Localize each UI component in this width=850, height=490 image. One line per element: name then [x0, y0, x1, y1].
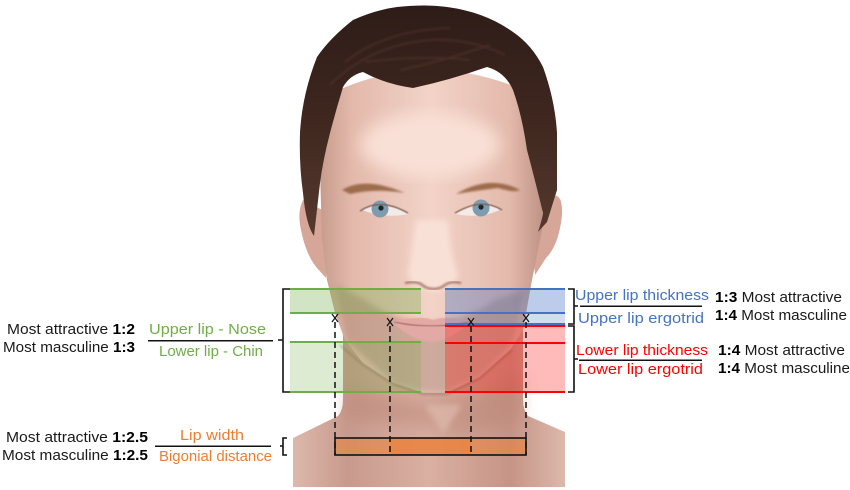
left ratio: upper lip nose / lower lip chin: Most masculine 1:3 [3, 339, 135, 356]
right ear [530, 195, 562, 275]
right ratio: lower lip thickness / ergotrid: 1:4 Most masculine [718, 360, 850, 377]
right ratio: upper lip thickness / ergotrid: 1:3 Most attractive [715, 289, 842, 306]
left ratio: lip width / bigonial distance: Lip width [180, 427, 244, 444]
left ratio: lip width / bigonial distance [2, 427, 272, 465]
left ratio: upper lip nose / lower lip chin [3, 321, 273, 360]
right ratio: lower lip thickness / ergotrid [576, 342, 850, 378]
lips [392, 318, 470, 342]
left ear [299, 200, 332, 278]
right ratio: upper lip thickness / ergotrid: Upper lip thickness [575, 287, 709, 304]
photo: man's face [293, 6, 565, 487]
right ratio: lower lip thickness / ergotrid: 1:4 Most attractive [718, 342, 845, 359]
right eye [455, 200, 502, 216]
dashed guide lines with x markers [332, 314, 529, 455]
bracket: lip width [280, 438, 287, 455]
overlay: lip width and bigonial distance box [335, 438, 526, 455]
left bracket: lips and chin [278, 289, 290, 392]
overlay: upper lip to nose (green) [290, 288, 421, 314]
left ratio: lip width / bigonial distance: Most attractive 1:2.5 [6, 429, 148, 446]
right eyebrow [456, 183, 520, 194]
left ratio: upper lip nose / lower lip chin: Upper lip - Nose [149, 321, 266, 338]
right ratio: upper lip thickness / ergotrid: Upper lip ergotrid [578, 310, 704, 327]
forehead highlight [360, 113, 500, 177]
left eyebrow [342, 184, 405, 194]
left ratio: lip width / bigonial distance: Most masculine 1:2.5 [2, 447, 148, 464]
right ratio: upper lip thickness / ergotrid [575, 287, 847, 327]
right bracket: lower lip [568, 326, 578, 392]
right ratio: upper lip thickness / ergotrid: 1:4 Most masculine [715, 307, 847, 324]
face skin [318, 70, 544, 393]
right bracket: upper lip [568, 289, 578, 324]
overlay: upper lip thickness (blue) [445, 288, 565, 325]
left eye [360, 200, 408, 218]
neck and shoulders [293, 330, 565, 487]
right ratio: lower lip thickness / ergotrid: Lower lip ergotrid [578, 361, 703, 378]
hair [300, 6, 557, 236]
right ratio: lower lip thickness / ergotrid: Lower lip thickness [576, 342, 708, 359]
left ratio: upper lip nose / lower lip chin: Most attractive 1:2 [7, 321, 135, 338]
nose [408, 220, 458, 291]
left ratio: lip width / bigonial distance: Bigonial distance [159, 448, 272, 465]
hair strands [330, 28, 505, 85]
left ratio: upper lip nose / lower lip chin: Lower lip - Chin [159, 343, 263, 360]
overlay: lower lip thickness (red) [445, 325, 565, 393]
overlay: lower lip to chin (green) [290, 341, 421, 393]
